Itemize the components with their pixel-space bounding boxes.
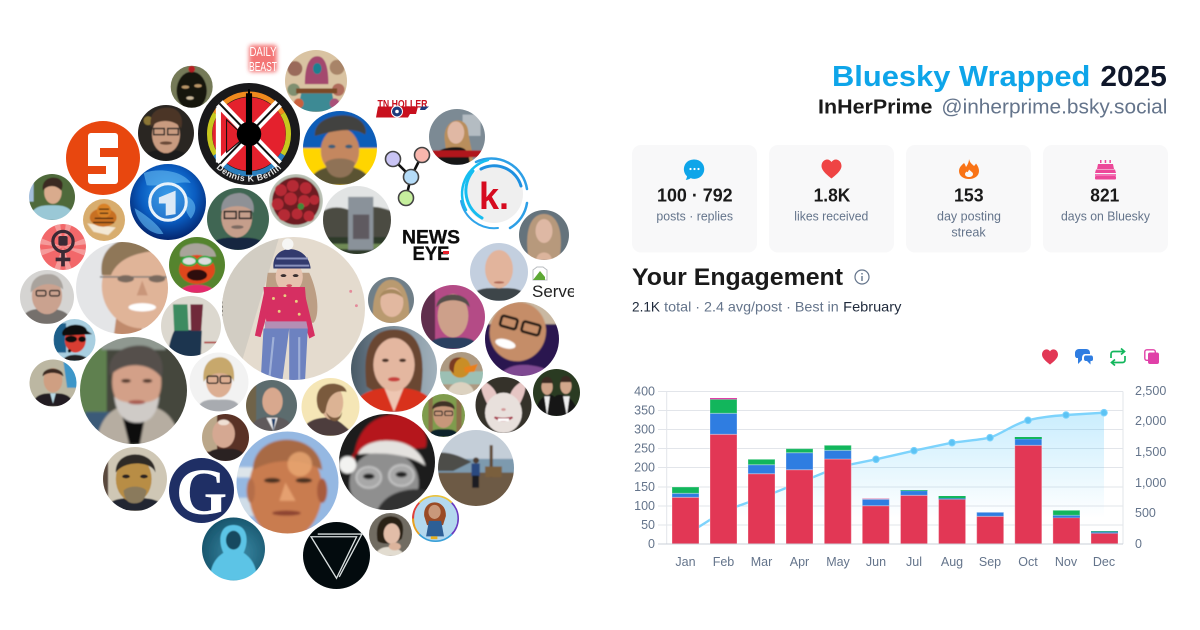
month labels: Feb bbox=[713, 555, 734, 569]
icon: birthday cake bbox=[1095, 160, 1116, 180]
avatar: blond man with glasses bbox=[190, 352, 248, 412]
title: 2025 bbox=[1100, 61, 1167, 93]
avatar: bald man, large, sky background bbox=[236, 432, 338, 534]
line points bbox=[873, 409, 1107, 463]
stat label: streak bbox=[951, 226, 986, 240]
icon: reposts bbox=[1111, 348, 1125, 366]
heading: Your Engagement: Your Engagement bbox=[632, 264, 843, 291]
icon: quotes bbox=[1145, 350, 1159, 364]
avatar: rubber duck doctor bbox=[440, 352, 483, 395]
month labels: Aug bbox=[941, 555, 963, 569]
avatar: bald man in suit bbox=[246, 380, 297, 431]
avatar: grey-haired man with glasses bbox=[207, 188, 269, 250]
avatar: woman in red jacket bbox=[351, 326, 437, 412]
subtitle: profile name and handle: InHerPrime bbox=[818, 96, 932, 118]
cumulative area bbox=[686, 413, 1104, 544]
right axis labels: 2,000 bbox=[1135, 414, 1166, 428]
left axis labels: 200 bbox=[634, 460, 655, 474]
engagement summary line bbox=[632, 299, 901, 315]
grid lines bbox=[658, 392, 1123, 544]
bar: Jul bbox=[900, 490, 928, 544]
cumulative line bbox=[686, 413, 1104, 535]
left axis labels: 350 bbox=[634, 404, 655, 418]
left axis labels: 0 bbox=[648, 537, 655, 551]
stat value: 100 · 792 bbox=[657, 185, 733, 206]
avatar: young man in blue t-shirt bbox=[29, 174, 75, 220]
bar: Apr bbox=[786, 449, 813, 544]
logo: News Eye: EYE bbox=[412, 243, 450, 265]
logo: tagesschau globe bbox=[130, 164, 206, 240]
left axis labels: 400 bbox=[634, 384, 655, 398]
avatar: red muppet with green glasses bbox=[169, 237, 225, 293]
panel: day posting streak bbox=[906, 145, 1031, 252]
avatar: laughing man with glasses, purple bbox=[485, 302, 559, 376]
logo: orange S bbox=[66, 121, 140, 195]
engagement summary line: February bbox=[843, 299, 901, 315]
logo: feminist fist symbol bbox=[40, 224, 86, 270]
bar: Oct bbox=[1015, 437, 1042, 544]
avatar: older man with glasses bbox=[20, 270, 74, 324]
avatar: Dennis K Berlin badge bbox=[198, 83, 300, 185]
avatar: bearded man, stylised bbox=[97, 441, 173, 517]
panel: likes received bbox=[769, 145, 894, 252]
avatar: couple in suits bbox=[533, 369, 580, 416]
right axis labels: 500 bbox=[1135, 506, 1156, 520]
left axis labels: 50 bbox=[641, 518, 655, 532]
stacked bar and line chart bbox=[634, 384, 1166, 569]
subtitle: profile name and handle: @inherprime.bsky.social bbox=[941, 96, 1167, 118]
logo: News Eye: NEWS bbox=[402, 226, 460, 248]
avatar: Berlin wall segment bbox=[323, 186, 391, 254]
avatar: blonde woman, grey background bbox=[519, 210, 569, 260]
right axis labels bbox=[1135, 384, 1166, 551]
stat label bbox=[937, 210, 1001, 240]
engagement summary line: 2.1K bbox=[632, 299, 661, 315]
avatar: blonde woman, small bbox=[368, 277, 414, 323]
avatar: man on magenta background bbox=[421, 285, 485, 349]
bar: May bbox=[824, 445, 851, 544]
bar: Jun bbox=[862, 498, 889, 544]
avatar: folk art woman bbox=[285, 50, 347, 112]
logo: News Eye bbox=[402, 226, 460, 265]
stat label: day posting bbox=[937, 210, 1001, 224]
bar: Nov bbox=[1053, 510, 1080, 544]
stat value: 821 bbox=[1090, 185, 1119, 206]
stat value: 1.8K bbox=[814, 185, 851, 206]
avatar: blue hooded figure bbox=[196, 511, 271, 587]
icon: flame bbox=[959, 159, 979, 179]
month labels: Jun bbox=[866, 555, 886, 569]
logo: TN Holler: TN HOLLER bbox=[378, 98, 428, 110]
left axis labels: 100 bbox=[634, 499, 655, 513]
month labels bbox=[675, 555, 1115, 569]
bubble cloud of top interactors bbox=[20, 42, 580, 589]
avatar: woman in Santa hat bbox=[339, 414, 435, 510]
month labels: Jul bbox=[906, 555, 922, 569]
photo: person by the lake bbox=[438, 430, 514, 506]
stat value: 153 bbox=[954, 185, 984, 206]
right axis labels: 1,000 bbox=[1135, 476, 1166, 490]
logo: The Guardian G: G bbox=[176, 456, 227, 529]
month labels: Mar bbox=[751, 555, 772, 569]
avatar: bald man in checked shirt bbox=[470, 243, 528, 301]
left axis labels bbox=[634, 384, 655, 551]
logo: double triangle bbox=[303, 522, 370, 589]
avatar: tiger cartoon bbox=[83, 199, 125, 241]
left axis labels: 300 bbox=[634, 422, 655, 436]
bar: Sep bbox=[977, 512, 1004, 544]
stat label: posts · replies bbox=[656, 210, 733, 224]
icon: chat bubble bbox=[684, 159, 704, 180]
chart legend icons bbox=[1042, 348, 1159, 366]
photo: sneakers on desk bbox=[161, 296, 221, 356]
month labels: Nov bbox=[1055, 555, 1078, 569]
avatar: main illustrated girl in pink sweater bbox=[222, 237, 365, 380]
avatar: dark-haired woman, hand on chin bbox=[369, 513, 412, 556]
broken image placeholder: Server bbox=[532, 283, 583, 301]
logo: Daily Beast: DAILY bbox=[250, 44, 277, 59]
avatar: man in suit, whiteboard bbox=[30, 360, 76, 406]
bar: Jan bbox=[672, 487, 699, 544]
bar: Feb bbox=[710, 398, 737, 544]
left axis labels: 250 bbox=[634, 442, 655, 456]
bar: Mar bbox=[748, 459, 775, 544]
avatar: Dennis K Berlin badge: Dennis K Berlin bbox=[216, 164, 282, 182]
avatar: woman at desk, news ticker bbox=[429, 109, 485, 165]
avatar: balaclava bbox=[170, 66, 213, 108]
logo: network nodes bbox=[386, 148, 430, 206]
logo: TN Holler bbox=[376, 98, 429, 118]
bars bbox=[672, 398, 1118, 544]
icon: heart bbox=[822, 160, 842, 178]
avatar: red-faced pilot bbox=[54, 319, 96, 361]
right axis labels: 0 bbox=[1135, 537, 1142, 551]
stat label: days on Bluesky bbox=[1061, 210, 1151, 224]
stat label: likes received bbox=[794, 210, 868, 224]
month labels: Apr bbox=[790, 555, 809, 569]
broken image placeholder bbox=[532, 266, 574, 297]
bar: Dec bbox=[1091, 531, 1118, 544]
engagement summary line: total · 2.4 avg/post · Best in bbox=[664, 299, 839, 315]
logo: Daily Beast: BEAST bbox=[249, 59, 277, 74]
avatar: silver-haired man in grey jacket bbox=[80, 337, 187, 444]
logo: k. swirl bbox=[461, 159, 527, 228]
icon: info bbox=[855, 270, 869, 284]
avatar: bowl of strawberries bbox=[269, 174, 323, 228]
subtitle: profile name and handle bbox=[818, 96, 1167, 118]
left axis labels: 150 bbox=[634, 480, 655, 494]
month labels: Dec bbox=[1093, 555, 1115, 569]
avatar: bearded man in profile bbox=[302, 378, 360, 436]
title: Bluesky Wrapped bbox=[832, 61, 1090, 93]
right axis labels: 2,500 bbox=[1135, 384, 1166, 398]
panel: posts and replies bbox=[632, 145, 757, 252]
avatar: man with glasses, dark background bbox=[138, 105, 194, 161]
avatar: man with glasses in woods bbox=[422, 394, 465, 437]
month labels: May bbox=[826, 555, 851, 569]
logo: Daily Beast bbox=[249, 44, 277, 74]
month labels: Oct bbox=[1018, 555, 1038, 569]
icon: likes bbox=[1042, 349, 1058, 365]
avatar: smiling man with thin glasses, large bbox=[76, 242, 168, 334]
month labels: Sep bbox=[979, 555, 1001, 569]
logo: k. swirl: k. bbox=[479, 176, 509, 218]
avatar: rainbow ring cartoon girl bbox=[412, 495, 459, 542]
panel: days on Bluesky bbox=[1043, 145, 1168, 252]
bar: Aug bbox=[939, 496, 966, 544]
avatar: man in cap, Ukrainian flag bbox=[303, 111, 377, 185]
avatar: bald smiling man bbox=[202, 414, 249, 461]
avatar: grinning rabbit bbox=[476, 377, 532, 433]
month labels: Jan bbox=[675, 555, 696, 569]
right axis labels: 1,500 bbox=[1135, 445, 1166, 459]
baseline bbox=[658, 543, 1123, 545]
icon: replies bbox=[1075, 349, 1093, 364]
